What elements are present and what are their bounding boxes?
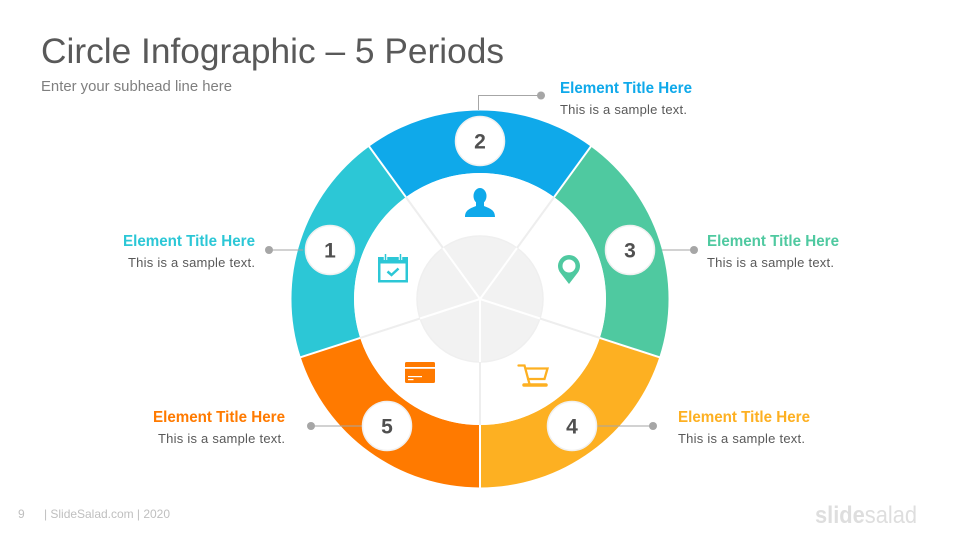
label 3 — [707, 233, 839, 270]
icon: shopping cart — [518, 366, 548, 385]
number badge 3 — [606, 226, 654, 274]
number badge 2: 2 — [474, 130, 486, 154]
label 4 — [678, 409, 810, 446]
connector 2 — [478, 92, 545, 110]
title: Circle Infographic – 5 Periods — [41, 32, 504, 71]
segment 2: blue — [369, 110, 591, 197]
segment 3: green — [554, 146, 669, 357]
label 4: This is a sample text. — [678, 431, 805, 446]
label 4: Element Title Here — [678, 409, 810, 426]
label 1: This is a sample text. — [128, 255, 255, 270]
number badge 3: 3 — [624, 240, 636, 262]
icon: credit card — [405, 362, 435, 383]
icon: user — [465, 188, 495, 217]
circle diagram — [291, 110, 669, 489]
label 2 — [560, 80, 692, 117]
number badge 1: 1 — [324, 240, 336, 262]
label 1 — [123, 233, 255, 270]
centre grey disc — [417, 236, 543, 362]
number badge 5 — [362, 402, 412, 450]
label 5: Element Title Here — [153, 409, 285, 426]
label 3: This is a sample text. — [707, 255, 834, 270]
number badge 4 — [548, 402, 596, 450]
connector 1 — [265, 246, 303, 254]
connector 5 — [307, 422, 362, 430]
label 2: This is a sample text. — [560, 102, 687, 117]
segment 5: orange — [301, 338, 480, 488]
number badge 2 — [456, 116, 504, 166]
footer: | SlideSalad.com | 2020 — [44, 507, 170, 521]
number badge 5: 5 — [381, 416, 393, 438]
connector 4 — [597, 422, 657, 430]
connector 3 — [662, 246, 698, 254]
label 2: Element Title Here — [560, 80, 692, 97]
label 5: This is a sample text. — [158, 431, 285, 446]
footer: 9 — [18, 507, 25, 521]
inner white disc — [354, 173, 606, 425]
label 1: Element Title Here — [123, 233, 255, 250]
label 3: Element Title Here — [707, 233, 839, 250]
icon: calendar — [378, 253, 408, 281]
label 5 — [153, 409, 285, 446]
number badge 4: 4 — [566, 416, 578, 438]
icon: location pin — [558, 255, 580, 284]
subhead: Enter your subhead line here — [41, 79, 232, 95]
number badge 1 — [306, 226, 354, 274]
segment 1: teal — [291, 146, 406, 357]
brand logo: slidesalad — [815, 502, 917, 529]
segment 4: yellow — [480, 338, 659, 488]
